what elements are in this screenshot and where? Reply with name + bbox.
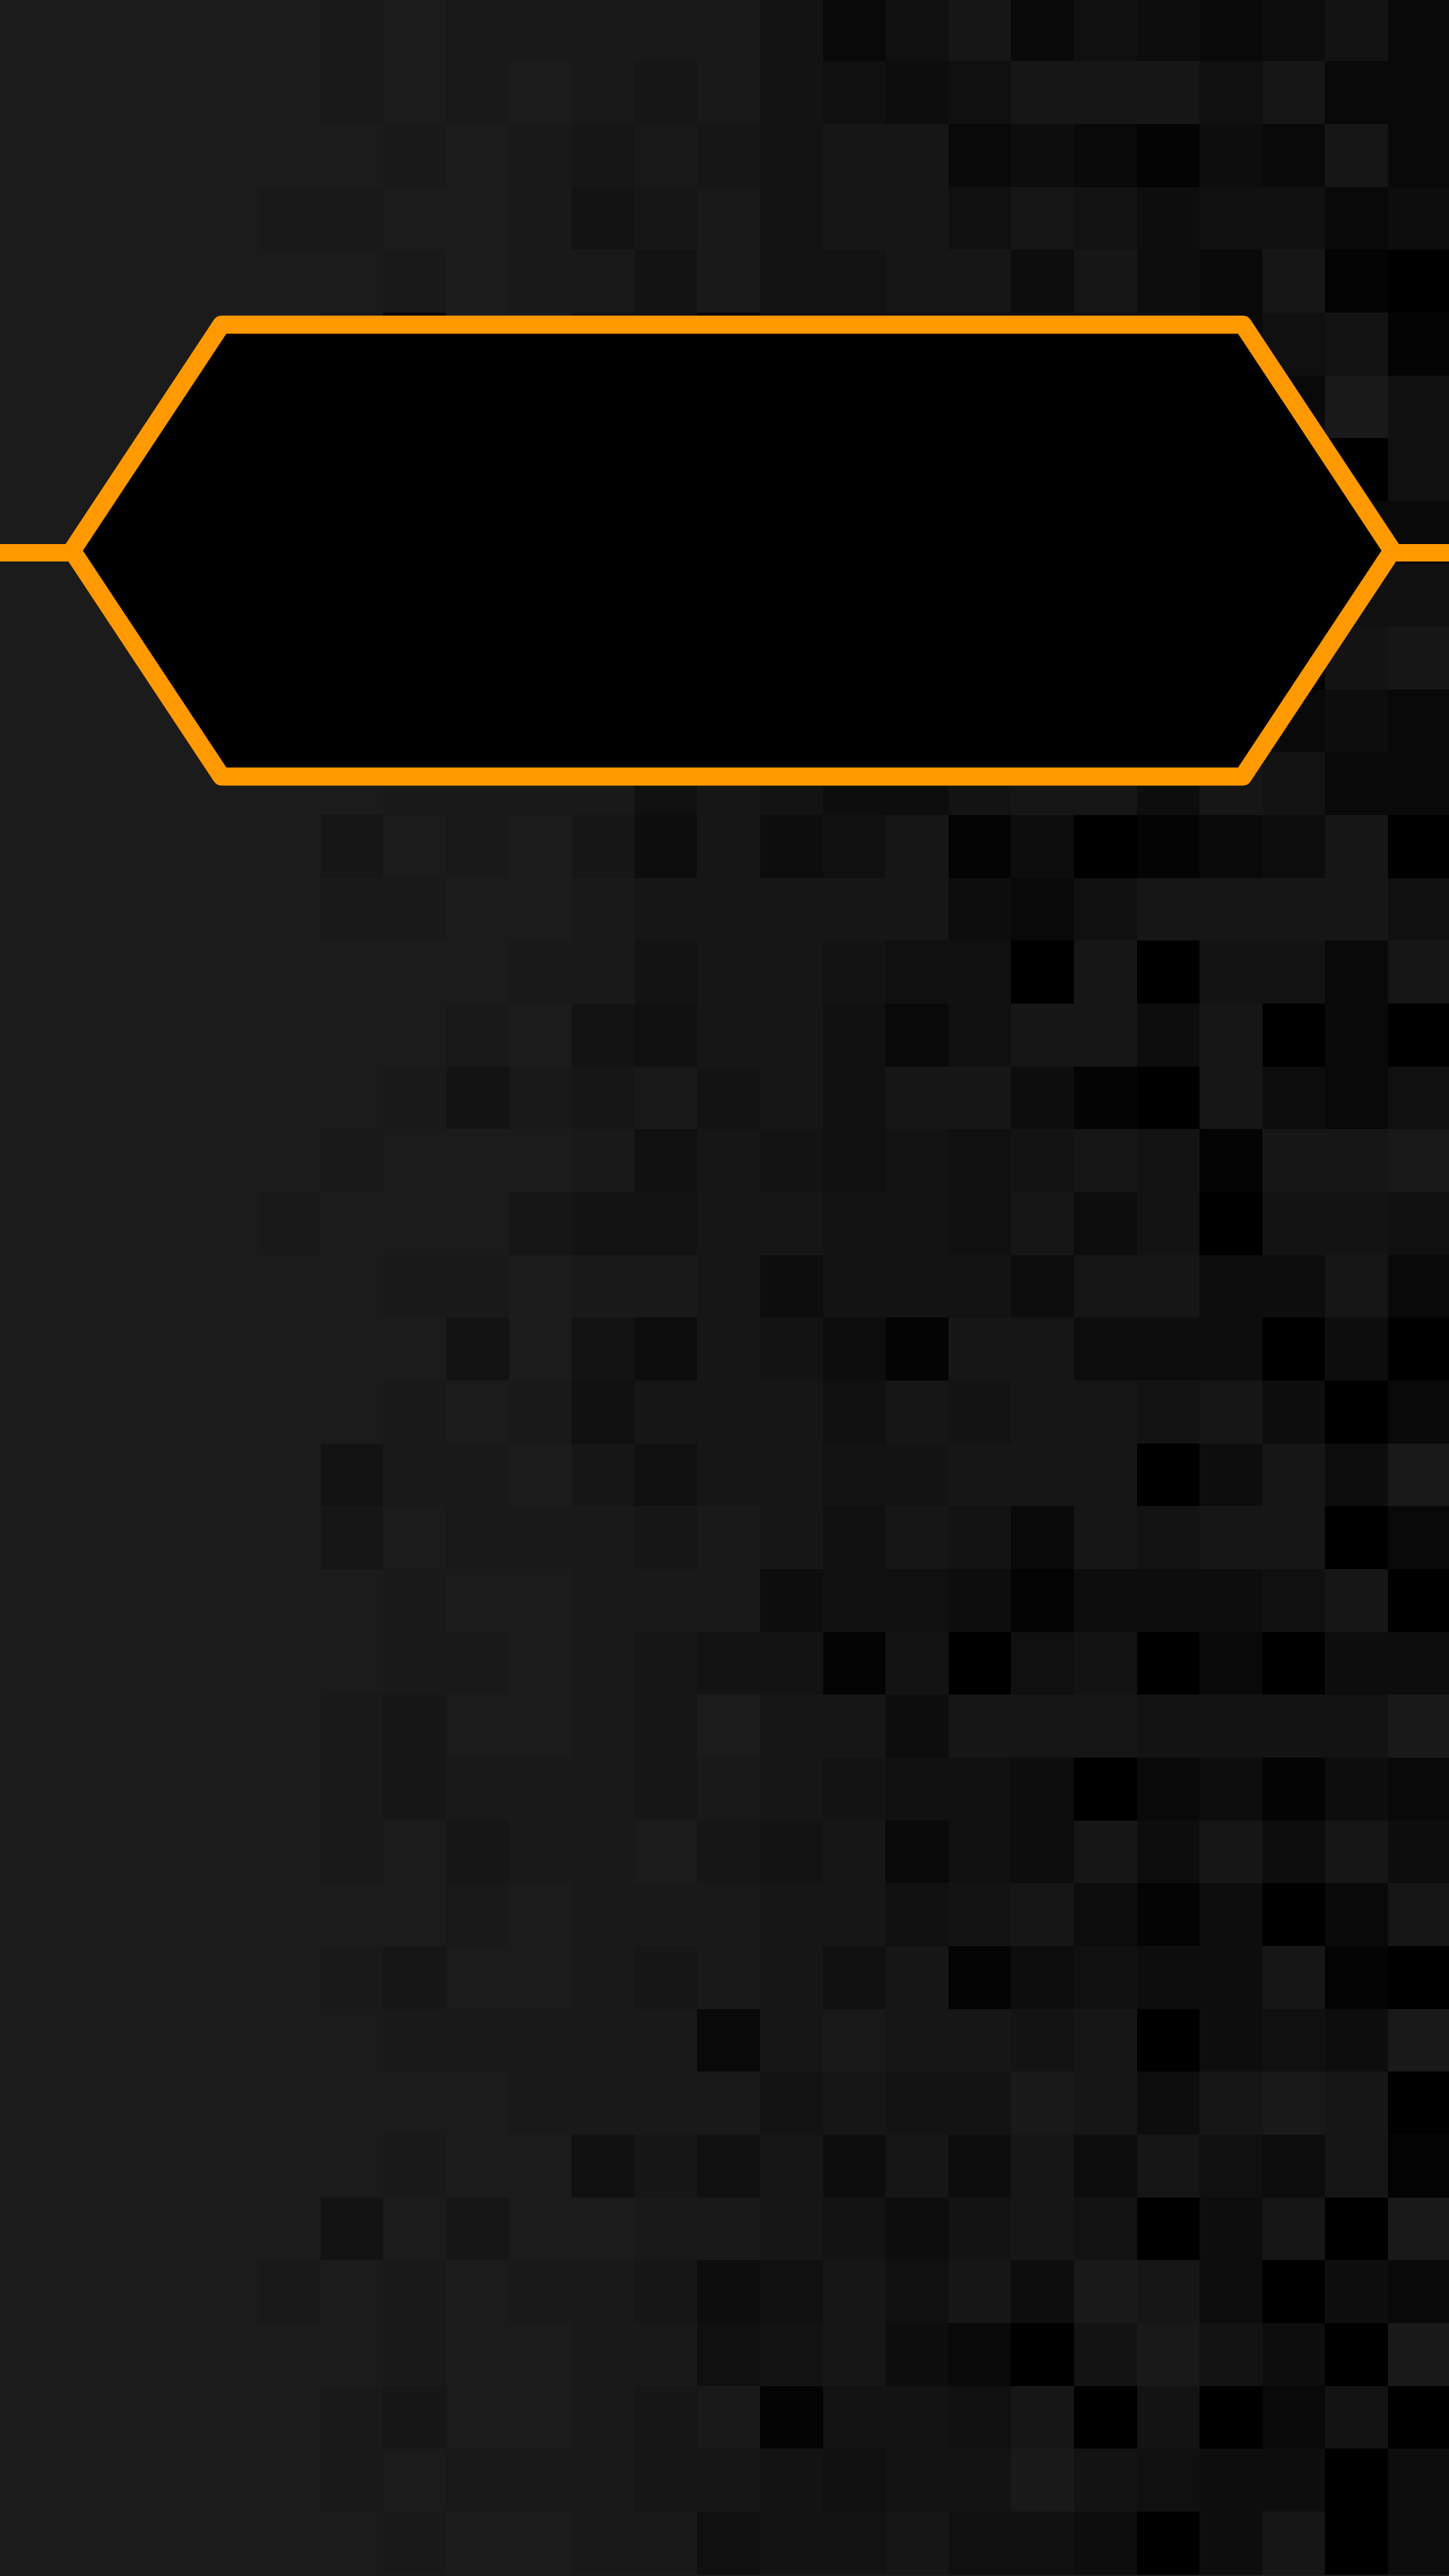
connector: left orange line [0,544,75,561]
connector: right orange line [1389,544,1449,561]
hexagon: black fill with orange outline [72,325,1393,777]
